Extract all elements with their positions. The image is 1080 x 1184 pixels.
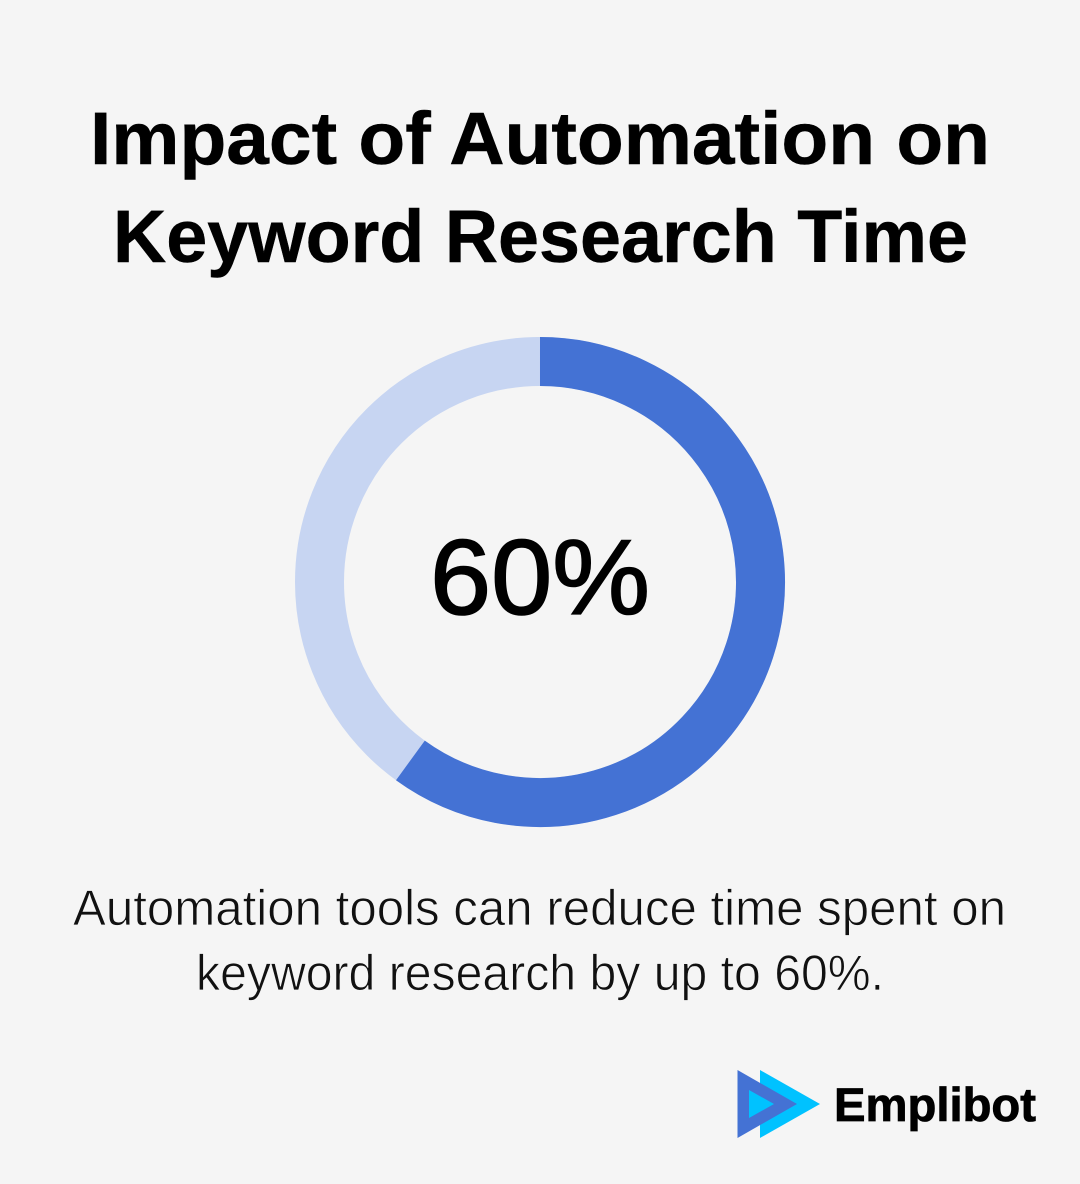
title xyxy=(90,97,990,278)
title: Impact of Automation on xyxy=(90,97,990,180)
icon: play triangles xyxy=(738,1070,820,1138)
description text: Automation tools can reduce time spent on xyxy=(73,880,1006,936)
description text xyxy=(73,880,1006,1001)
donut chart: 60% xyxy=(320,362,760,802)
description text: keyword research by up to 60%. xyxy=(196,945,884,1001)
wordmark: Emplibot xyxy=(834,1078,1036,1131)
title: Keyword Research Time xyxy=(113,195,968,278)
logo: Emplibot xyxy=(738,1070,1036,1138)
center value: 60% xyxy=(430,517,650,637)
